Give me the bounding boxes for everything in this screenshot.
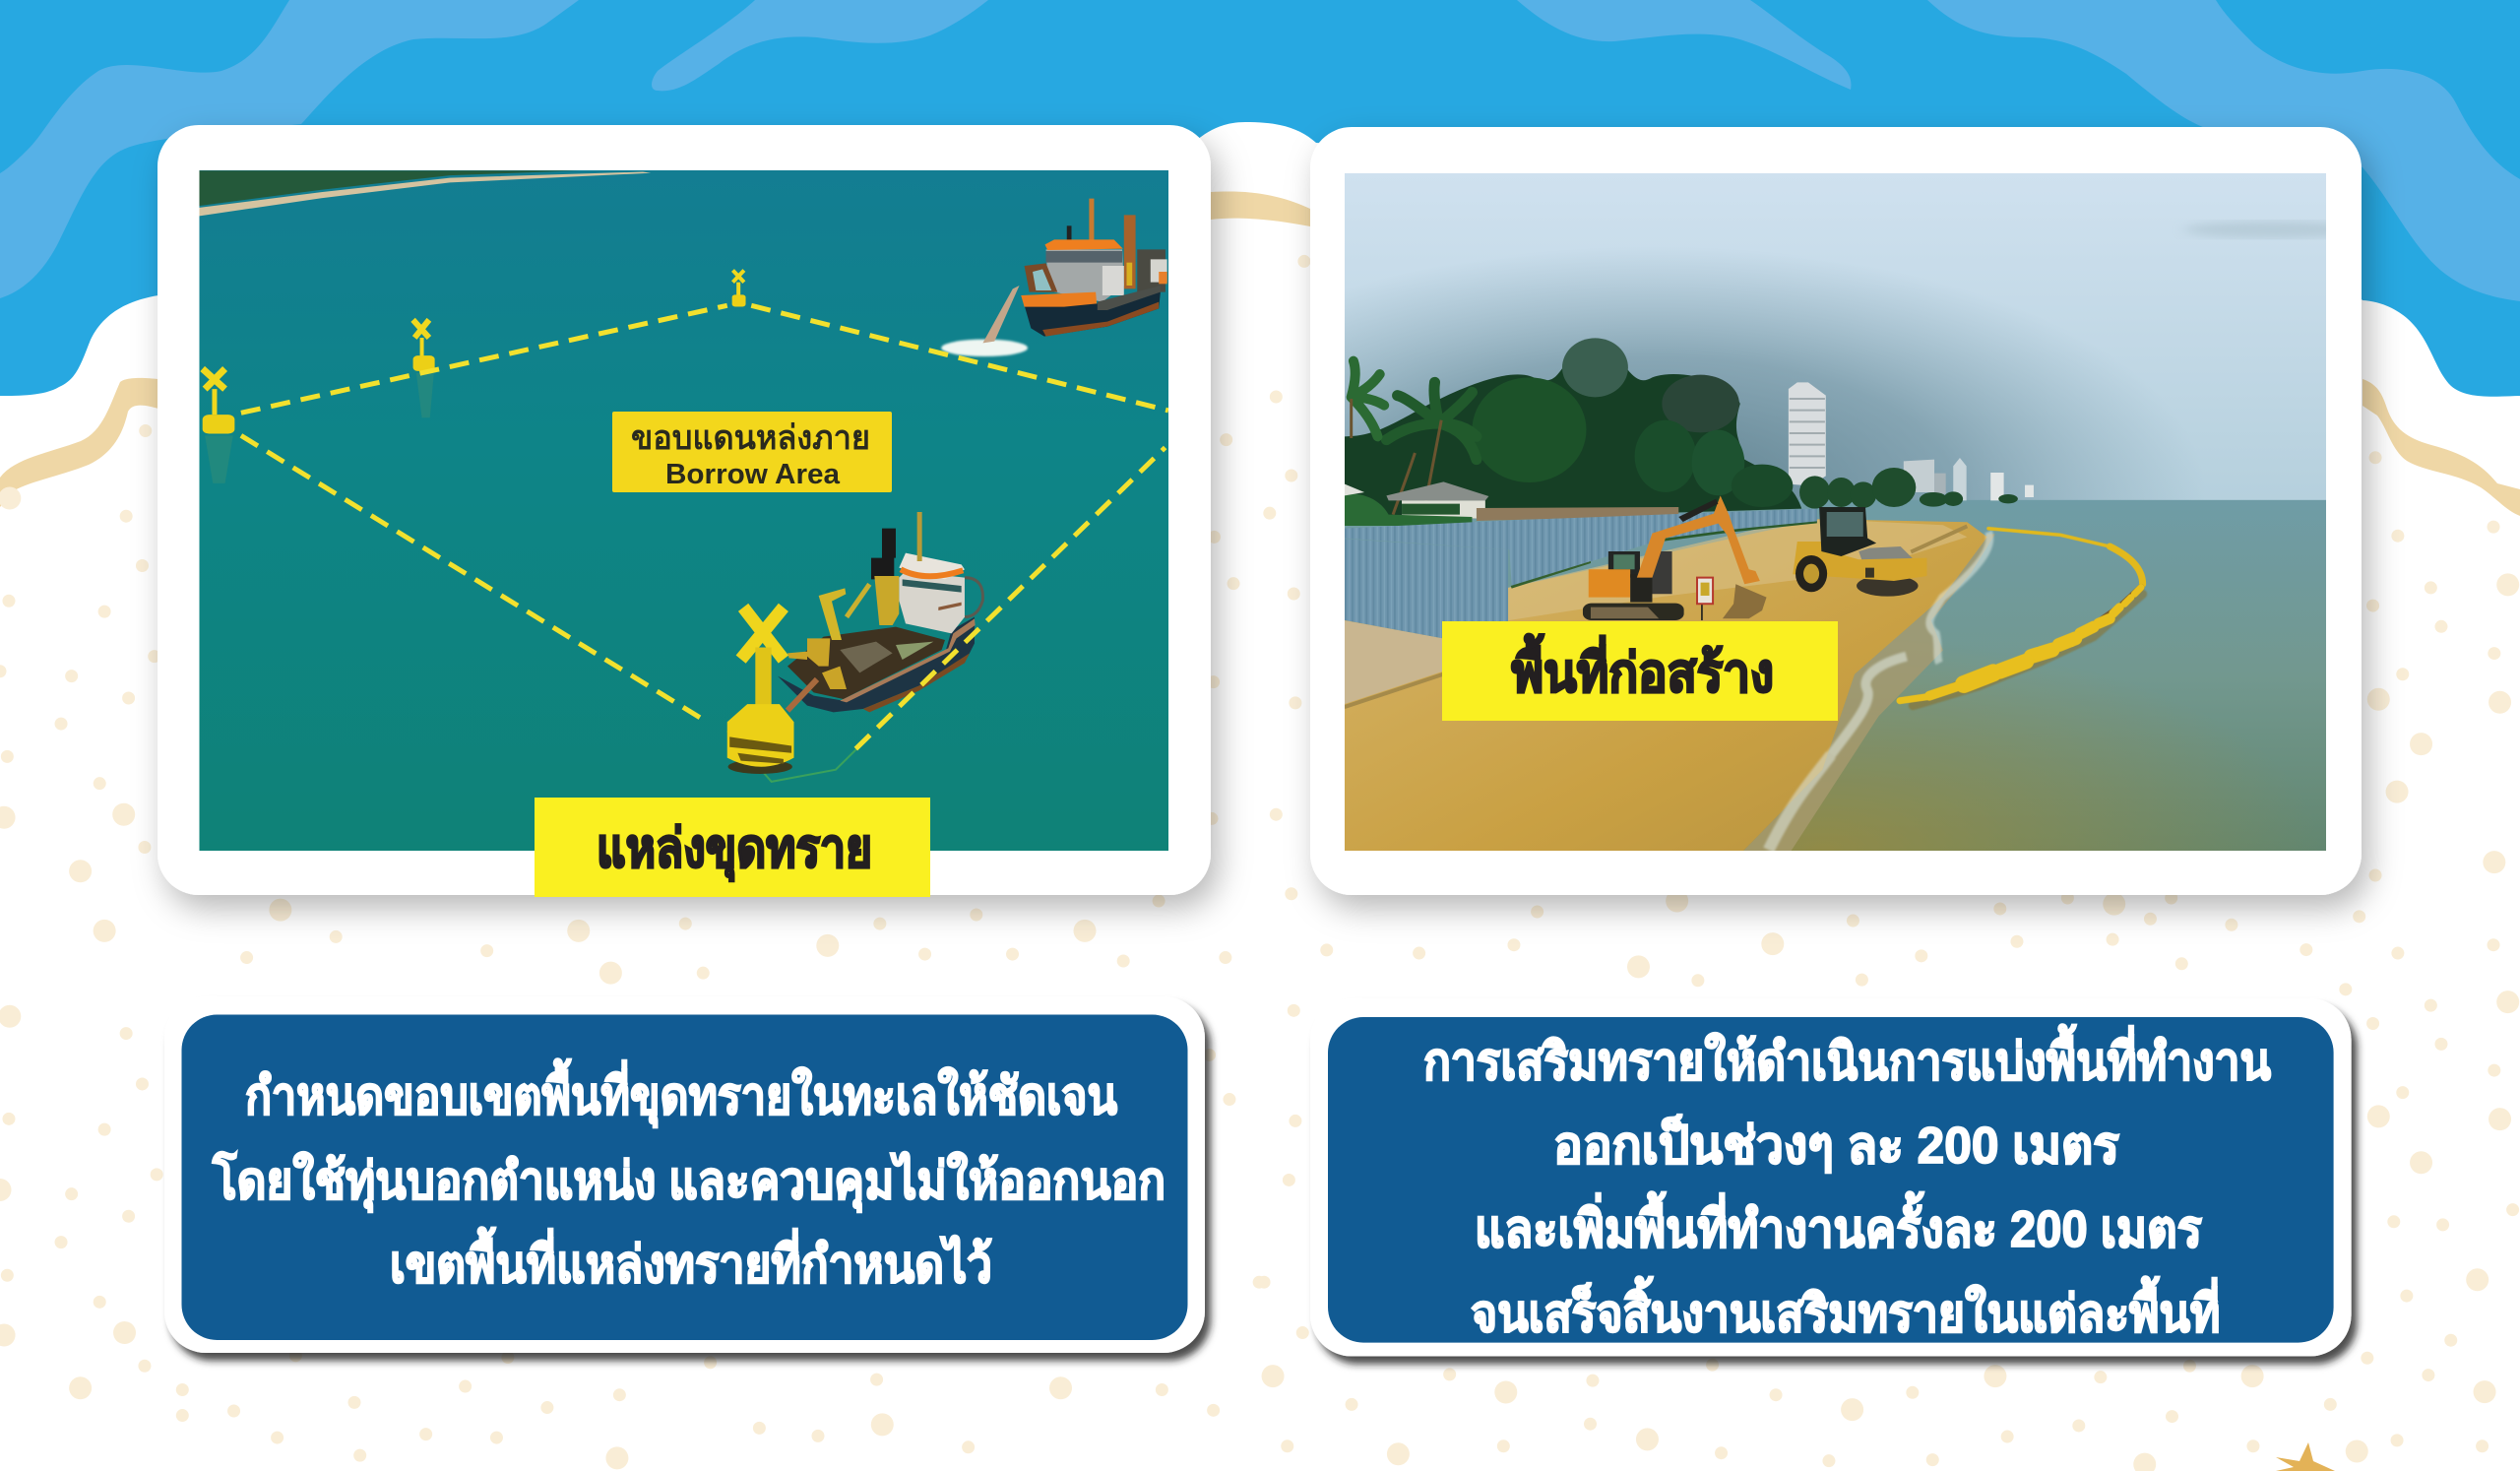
label: แหล่งขุดทราย xyxy=(535,798,930,897)
sign: borrow area: ขอบแดนหล่งภาย xyxy=(631,419,870,457)
dredger top right xyxy=(941,199,1167,356)
background: tan shoreline stripes xyxy=(0,192,2520,516)
label: พื้นที่ก่อสร้าง xyxy=(1442,621,1838,721)
sand beach xyxy=(1345,519,1987,852)
description text: จนเสร็จสิ้นงานเสริมทรายในแต่ละพื้นที่ xyxy=(1471,1276,2221,1343)
panel: borrow area photo card xyxy=(158,125,1211,897)
shoreline skyline, trees and fence xyxy=(1345,338,2034,526)
label: แหล่งขุดทราย: แหล่งขุดทราย xyxy=(597,819,872,882)
icon: starfish xyxy=(2276,1442,2335,1471)
description text: โดยใช้ทุ่นบอกตำแหน่ง และควบคุมไม่ให้ออกนอก xyxy=(212,1150,1166,1213)
description text: ออกเป็นช่วงๆ ละ 200 เมตร xyxy=(1553,1115,2119,1175)
sign: borrow area xyxy=(612,412,892,492)
road roller xyxy=(1793,507,1926,597)
description text: เขตพื้นที่แหล่งทรายที่กำหนดไว้ xyxy=(390,1227,992,1294)
label: พื้นที่ก่อสร้าง: พื้นที่ก่อสร้าง xyxy=(1512,634,1774,703)
small buoys xyxy=(203,271,746,483)
description text: การเสริมทรายให้ดำเนินการแบ่งพื้นที่ทำงาน xyxy=(1423,1024,2271,1091)
description text: กำหนดขอบเขตพื้นที่ขุดทรายในทะเลให้ชัดเจน xyxy=(245,1058,1117,1128)
description text xyxy=(212,1058,1166,1294)
excavator xyxy=(1583,495,1767,620)
sign: borrow area: Borrow Area xyxy=(665,459,841,490)
panel: borrow area description xyxy=(164,996,1205,1353)
description text xyxy=(1423,1024,2271,1343)
panel: construction area photo card xyxy=(1300,124,2387,927)
dredger foreground xyxy=(778,512,982,712)
dashed borrow boundary xyxy=(241,305,1168,749)
photo: dredgers inside buoy-marked borrow area xyxy=(199,170,1168,851)
corrugated seawall fence xyxy=(1345,509,1817,638)
surf foam xyxy=(1769,532,1989,850)
photo: beach nourishment construction site xyxy=(1345,173,2326,851)
floating silt boom xyxy=(1900,529,2143,706)
description text: และเพิ่มพื้นที่ทำงานครั้งละ 200 เมตร xyxy=(1475,1191,2202,1258)
panel: construction area description xyxy=(1310,998,2352,1357)
large buoy xyxy=(727,608,794,774)
